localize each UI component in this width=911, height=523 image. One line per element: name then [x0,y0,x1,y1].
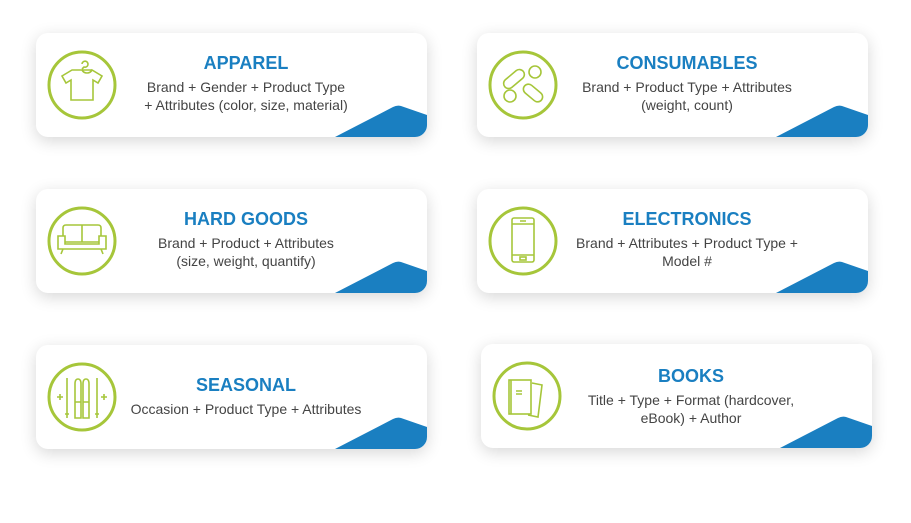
text: consumables: (weight, count) [641,97,733,113]
text: apparel [144,53,348,113]
text: hard goods: (size, weight, quantify) [176,253,316,269]
text: electronics: ELECTRONICS [622,209,752,229]
icon: books [492,362,562,430]
icon: phone [488,206,558,276]
text: books: Title + Type + Format (hardcover, [588,392,794,408]
icon: sofa [48,206,116,276]
card: hard goods [36,189,427,293]
card: books [481,344,872,448]
corner triangle [776,106,868,137]
text: electronics: Model # [662,253,712,269]
text: consumables: CONSUMABLES [616,53,758,73]
text: hard goods: Brand + Product + Attributes [158,235,334,251]
text: apparel: + Attributes (color, size, material) [144,97,348,113]
text: consumables [582,53,792,113]
corner triangle [776,262,868,293]
corner triangle [335,418,427,449]
text: books: eBook) + Author [641,410,741,426]
card: consumables [477,33,868,137]
text: consumables: Brand + Product Type + Attributes [582,79,792,95]
icon: t-shirt [48,50,116,120]
corner triangle [780,416,872,448]
card: apparel [36,33,427,137]
text: books: BOOKS [658,366,724,386]
text: apparel: APPAREL [204,53,288,73]
corner triangle [335,262,427,293]
card: seasonal [36,345,427,449]
text: electronics: Brand + Attributes + Product Type + [576,235,798,251]
text: seasonal [131,375,361,417]
text: seasonal: SEASONAL [196,375,296,395]
icon: pills [488,50,558,120]
icon: skis [48,362,116,432]
text: hard goods: HARD GOODS [184,209,308,229]
text: books [588,366,794,426]
text: hard goods [158,209,334,269]
text: apparel: Brand + Gender + Product Type [147,79,345,95]
text: electronics [576,209,798,269]
text: seasonal: Occasion + Product Type + Attributes [131,401,361,417]
corner triangle [335,106,427,137]
card: electronics [477,189,868,293]
